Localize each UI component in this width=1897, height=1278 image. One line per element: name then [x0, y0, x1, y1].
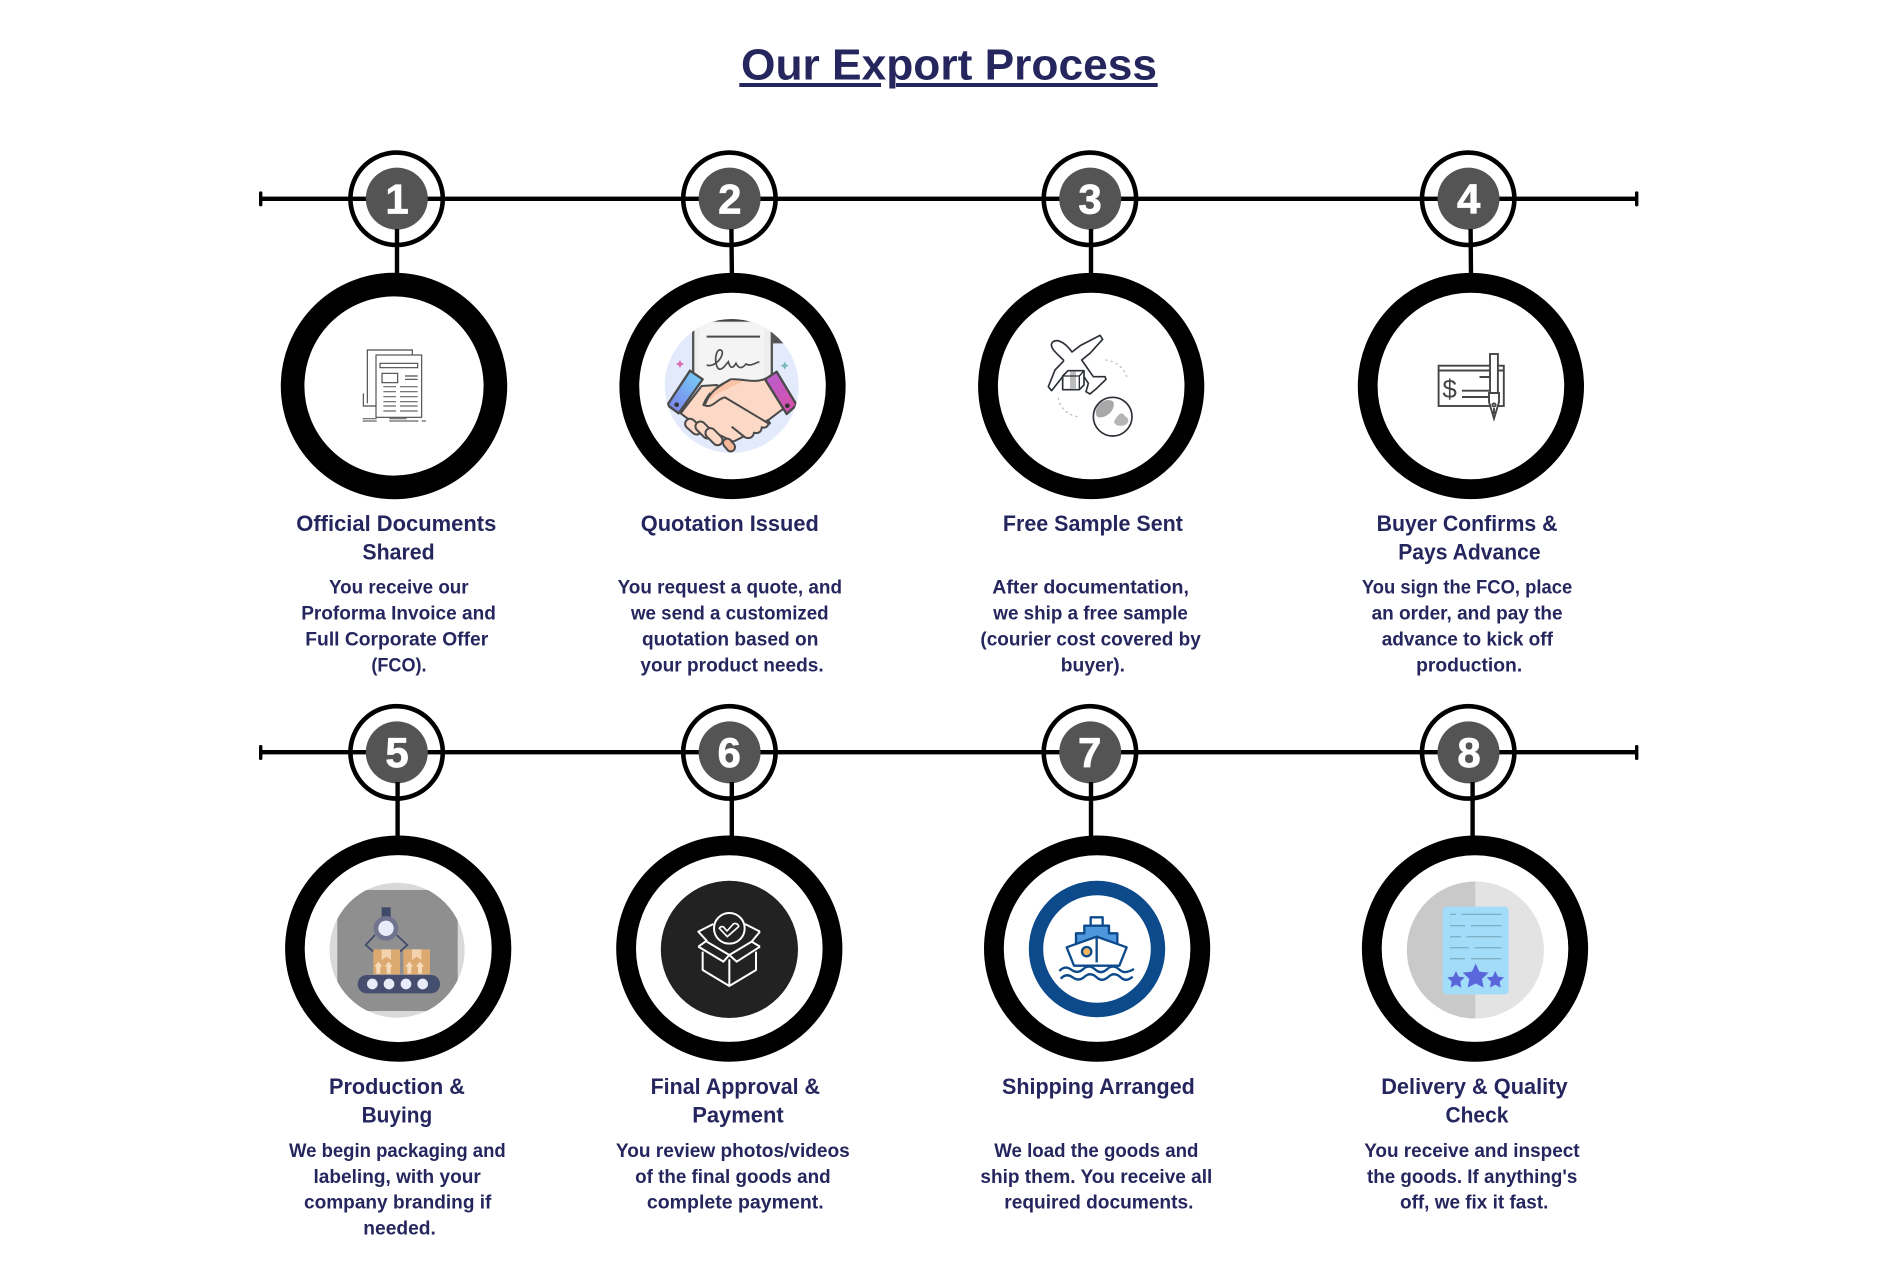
- body text 3: we ship a free sample: [992, 604, 1188, 625]
- body text 6: complete payment.: [647, 1193, 824, 1214]
- number badge 4: [1422, 153, 1514, 245]
- heading 4: Pays Advance: [1398, 540, 1541, 565]
- icon: plane, parcel and globe: [1048, 335, 1132, 436]
- heading 2: Quotation Issued: [641, 511, 819, 536]
- step 7: shipping arranged: [980, 706, 1212, 1214]
- body text 2: You request a quote, and: [618, 578, 842, 599]
- number badge 3: [1044, 153, 1136, 245]
- number badge 7: 7: [1078, 729, 1101, 776]
- body text 7: We load the goods and: [994, 1141, 1198, 1162]
- number badge 7: [1044, 706, 1136, 799]
- number badge 2: 2: [718, 176, 741, 222]
- body text 1: You receive our: [329, 578, 469, 599]
- body text 8: off, we fix it fast.: [1400, 1193, 1548, 1214]
- body text 2: quotation based on: [642, 630, 818, 651]
- body text 8: the goods. If anything's: [1367, 1167, 1577, 1188]
- body text 6: [616, 1141, 850, 1214]
- body text 3: (courier cost covered by: [980, 630, 1201, 651]
- number badge 1: [350, 153, 443, 245]
- body text 4: You sign the FCO, place: [1362, 578, 1572, 599]
- body text 8: You receive and inspect: [1364, 1141, 1580, 1162]
- heading 1: Official Documents: [296, 511, 496, 536]
- body text 5: [289, 1141, 506, 1240]
- body text 1: [301, 578, 496, 677]
- heading 8: Check: [1446, 1103, 1509, 1128]
- body text 1: Full Corporate Offer: [305, 630, 489, 651]
- heading 5: [329, 1074, 465, 1128]
- connector 7: [1089, 782, 1093, 838]
- number badge 8: 8: [1457, 729, 1481, 776]
- body text 3: buyer).: [1061, 656, 1125, 677]
- heading 1: [296, 511, 496, 565]
- number badge 5: 5: [385, 729, 409, 776]
- icon: production conveyor: [330, 883, 465, 1018]
- step 6: final approval and payment: [616, 706, 850, 1214]
- connector 4: [1468, 229, 1473, 276]
- icon ring 8: [1372, 845, 1578, 1052]
- icon ring 2: [629, 283, 836, 489]
- icon ring 3: [988, 283, 1194, 489]
- step 5: production and buying: [289, 706, 506, 1240]
- step 3: free sample sent: [980, 153, 1201, 677]
- connector 3: [1089, 229, 1093, 276]
- body text 4: production.: [1416, 656, 1522, 677]
- number badge 2: [683, 153, 776, 245]
- icon: handshake and signed document: [665, 318, 799, 453]
- body text 7: [980, 1141, 1212, 1214]
- body text 2: [618, 578, 842, 677]
- icon ring 1: [293, 285, 495, 487]
- heading 3: Free Sample Sent: [1003, 511, 1184, 536]
- heading 6: Final Approval &: [651, 1074, 820, 1099]
- step 4: buyer confirms and pays advance: [1362, 153, 1574, 677]
- body text 5: labeling, with your: [314, 1167, 481, 1188]
- body text 5: We begin packaging and: [289, 1141, 506, 1162]
- body text 2: we send a customized: [630, 604, 829, 625]
- body text 1: (FCO).: [371, 656, 426, 677]
- icon: ship in blue ring: [1036, 888, 1158, 1010]
- connector 8: [1470, 782, 1475, 838]
- icon ring 6: [626, 845, 832, 1052]
- step 1: official documents shared: [293, 153, 496, 677]
- body text 1: Proforma Invoice and: [301, 604, 496, 625]
- body text 6: of the final goods and: [635, 1167, 831, 1188]
- icon: quality report: [1407, 881, 1544, 1019]
- heading 5: Buying: [362, 1103, 432, 1128]
- number badge 6: [683, 706, 776, 799]
- connector 6: [730, 782, 734, 838]
- timeline: top row: [259, 191, 1638, 206]
- icon: cheque and pen: [1439, 354, 1504, 419]
- heading 6: [651, 1074, 820, 1128]
- body text 5: needed.: [363, 1219, 436, 1240]
- body text 6: You review photos/videos: [616, 1141, 850, 1162]
- body text 4: [1362, 578, 1572, 677]
- body text 7: ship them. You receive all: [980, 1167, 1212, 1188]
- number badge 4: 4: [1457, 176, 1481, 222]
- connector 5: [395, 782, 400, 838]
- icon: approved box: [661, 881, 798, 1018]
- body text 4: advance to kick off: [1382, 630, 1554, 651]
- body text 3: [980, 578, 1201, 677]
- icon ring 4: [1368, 283, 1574, 489]
- body text 5: company branding if: [304, 1193, 492, 1214]
- heading 4: [1377, 511, 1558, 565]
- icon: documents: [363, 350, 426, 421]
- body text 2: your product needs.: [640, 656, 824, 677]
- body text 7: required documents.: [1004, 1193, 1193, 1214]
- heading 4: Buyer Confirms &: [1377, 511, 1558, 536]
- heading 8: [1381, 1074, 1568, 1128]
- title: Our Export Process: [741, 40, 1157, 90]
- icon ring 7: [994, 845, 1200, 1052]
- body text 4: an order, and pay the: [1372, 604, 1563, 625]
- number badge 6: 6: [718, 729, 741, 776]
- heading 6: Payment: [692, 1103, 784, 1128]
- connector 2: [729, 229, 734, 276]
- number badge 1: 1: [385, 176, 409, 222]
- icon ring 5: [295, 845, 502, 1052]
- body text 3: After documentation,: [992, 578, 1189, 599]
- step 2: quotation issued: [618, 153, 842, 677]
- number badge 8: [1422, 706, 1514, 799]
- heading 5: Production &: [329, 1074, 465, 1099]
- body text 8: [1364, 1141, 1580, 1214]
- heading 1: Shared: [362, 540, 435, 565]
- number badge 3: 3: [1078, 176, 1102, 222]
- connector 1: [395, 229, 399, 276]
- icon: cheque and pen: $: [1442, 374, 1457, 404]
- step 8: delivery and quality check: [1364, 706, 1580, 1214]
- heading 7: Shipping Arranged: [1002, 1074, 1195, 1099]
- timeline: bottom row: [259, 745, 1638, 760]
- heading 8: Delivery & Quality: [1381, 1074, 1568, 1099]
- number badge 5: [350, 706, 443, 799]
